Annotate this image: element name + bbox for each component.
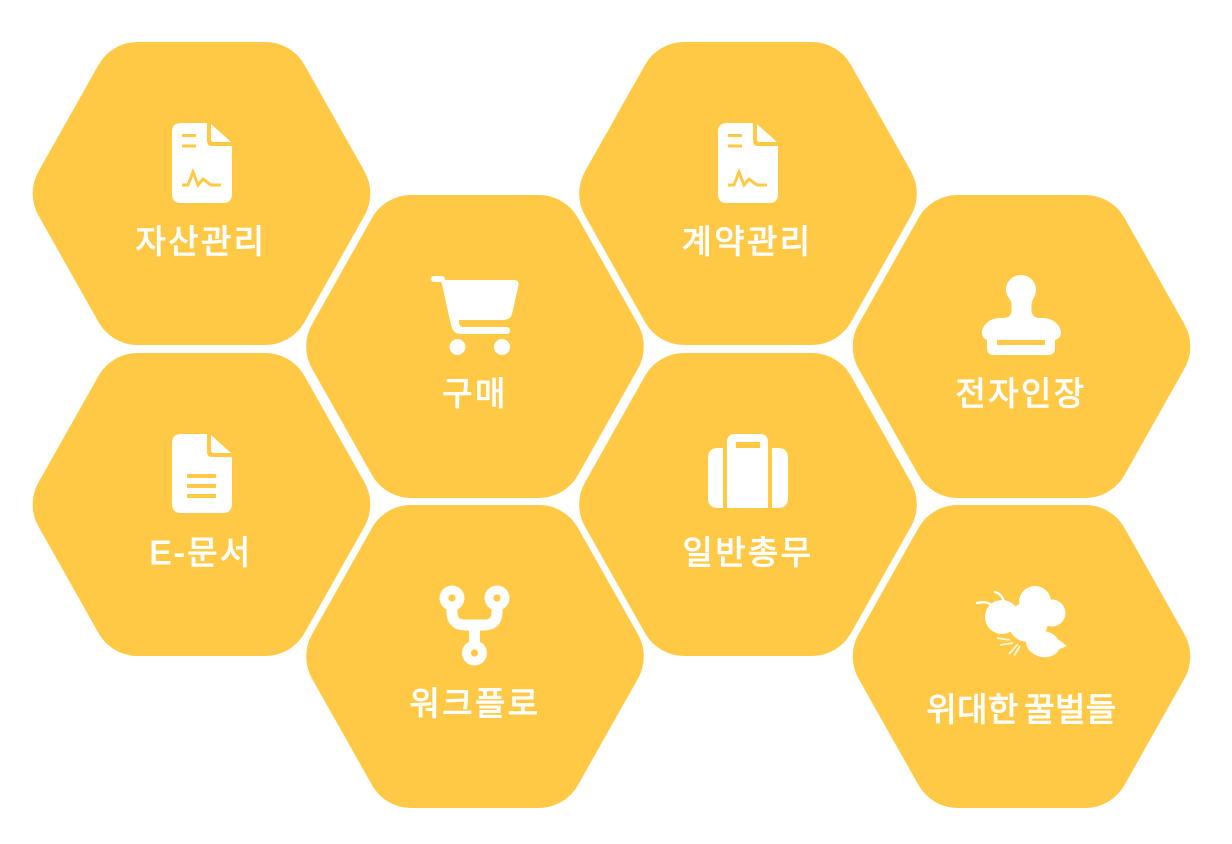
label: 전자인장 bbox=[955, 375, 1087, 412]
icon: document bbox=[172, 434, 232, 513]
label: 위대한 꿀벌들 bbox=[926, 691, 1117, 728]
hexagon: 일반총무 bbox=[579, 353, 917, 656]
label: 구매 bbox=[442, 375, 508, 412]
hexagon: 전자인장 bbox=[853, 195, 1190, 498]
hexagon: 워크플로 bbox=[306, 505, 644, 808]
label: 워크플로 bbox=[409, 685, 541, 722]
hexagon: E-문서 bbox=[33, 353, 370, 656]
icon: stamp bbox=[982, 275, 1061, 355]
icon: contract document bbox=[718, 123, 778, 203]
label: 계약관리 bbox=[681, 223, 813, 260]
hexagon: 구매 bbox=[306, 195, 644, 498]
icon: suitcase bbox=[708, 434, 788, 508]
icon: bee bbox=[977, 586, 1067, 660]
hexagon: 계약관리 bbox=[579, 42, 917, 345]
hexagon: 위대한 꿀벌들 bbox=[853, 505, 1190, 808]
icon: contract document bbox=[172, 123, 232, 203]
label: 자산관리 bbox=[135, 223, 267, 260]
hexagon: 자산관리 bbox=[33, 42, 370, 345]
icon: shopping cart bbox=[434, 279, 519, 355]
label: 일반총무 bbox=[682, 534, 814, 571]
icon: workflow branch bbox=[440, 586, 510, 666]
label: E-문서 bbox=[149, 534, 253, 571]
